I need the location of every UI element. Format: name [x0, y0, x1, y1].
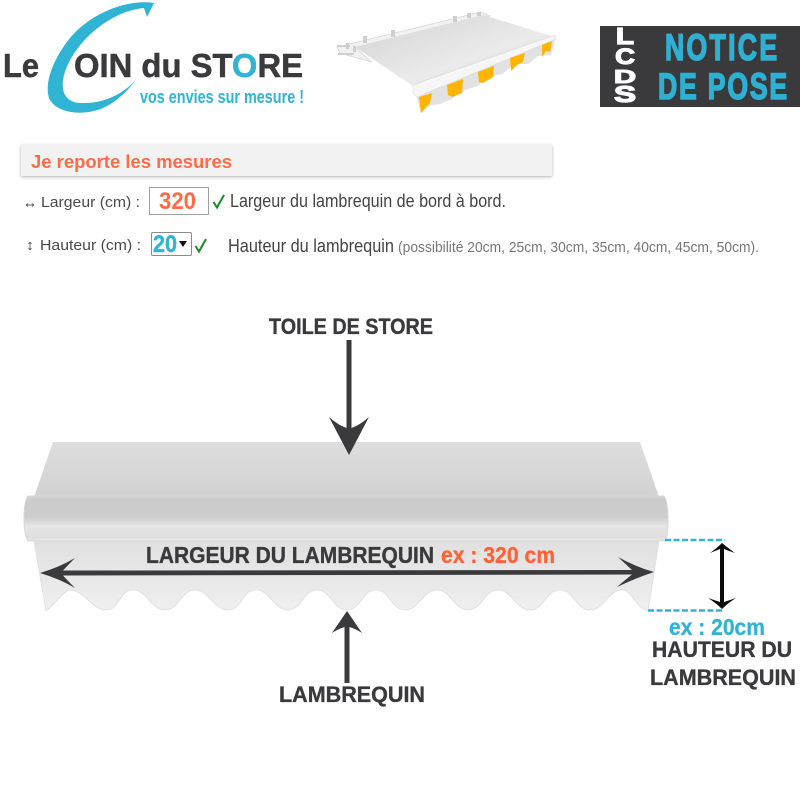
icon: check — [196, 239, 206, 252]
badge vertical letters LCDS: S — [614, 82, 636, 108]
logo: Le Coin du Store — [3, 2, 304, 113]
awning front bar — [413, 35, 556, 97]
arrow: width of valance — [40, 557, 654, 588]
arrow: up to valance — [332, 611, 362, 683]
awning hardware — [337, 12, 481, 55]
largeur input value: 320 — [159, 188, 196, 215]
panel: je reporte les mesures — [21, 145, 552, 176]
largeur label: Largeur (cm) : — [41, 195, 140, 211]
badge vertical letters LCDS: L — [616, 23, 634, 49]
canopy fabric — [34, 442, 659, 497]
hauteur select value — [152, 231, 192, 258]
awning canopy — [355, 15, 555, 86]
badge title: DE POSE — [658, 66, 789, 107]
label: hauteur du lambrequin — [650, 637, 796, 690]
label: hauteur du lambrequin: HAUTEUR DU — [652, 637, 792, 662]
logo: Le Coin du Store: OIN du STORE — [74, 47, 303, 84]
hauteur label: Hauteur (cm) : — [40, 238, 141, 254]
label: example height: ex : 20cm — [669, 614, 765, 640]
largeur input value — [150, 188, 208, 215]
label: example width: ex : 320 cm — [441, 542, 555, 568]
label: lambrequin: LAMBREQUIN — [279, 682, 425, 707]
icon: vertical arrow — [28, 242, 32, 250]
valance — [34, 541, 659, 611]
height dimension lines — [648, 540, 725, 610]
badge vertical letters LCDS — [614, 23, 636, 108]
awning yellow stripes — [419, 41, 552, 113]
hauteur select value: 20 — [153, 231, 177, 258]
icon: horizontal arrow — [26, 204, 34, 206]
awning diagram — [24, 442, 668, 611]
label: toile de store: TOILE DE STORE — [269, 314, 433, 339]
hauteur options: (possibilité 20cm, 25cm, 30cm, 35cm, 40cm, 45cm, 50cm). — [398, 239, 759, 256]
icon: check — [214, 195, 224, 208]
form row: hauteur — [28, 231, 759, 258]
roller cassette — [24, 496, 668, 541]
icon: awning product illustration — [337, 12, 556, 113]
logo wordmark: Le — [3, 47, 39, 84]
awning valance — [416, 40, 555, 113]
badge vertical letters LCDS: D — [614, 67, 636, 87]
awning rear rail — [337, 12, 490, 62]
panel heading: Je reporte les mesures — [31, 152, 232, 172]
hauteur description: Hauteur du lambrequin — [228, 236, 394, 256]
badge title — [658, 27, 789, 107]
arrow: height of valance — [708, 543, 736, 609]
form row: largeur — [26, 188, 506, 215]
label: hauteur du lambrequin: LAMBREQUIN — [650, 665, 796, 690]
badge: notice de pose — [600, 23, 800, 108]
label: largeur du lambrequin: LARGEUR DU LAMBREQUIN — [146, 542, 434, 568]
largeur description: Largeur du lambrequin de bord à bord. — [230, 191, 506, 211]
badge vertical letters LCDS: C — [615, 45, 635, 69]
logo tagline: vos envies sur mesure ! — [140, 87, 304, 107]
badge title: NOTICE — [665, 27, 779, 68]
icon: blue C swoosh — [48, 2, 154, 113]
arrow: down to fabric — [329, 340, 369, 455]
